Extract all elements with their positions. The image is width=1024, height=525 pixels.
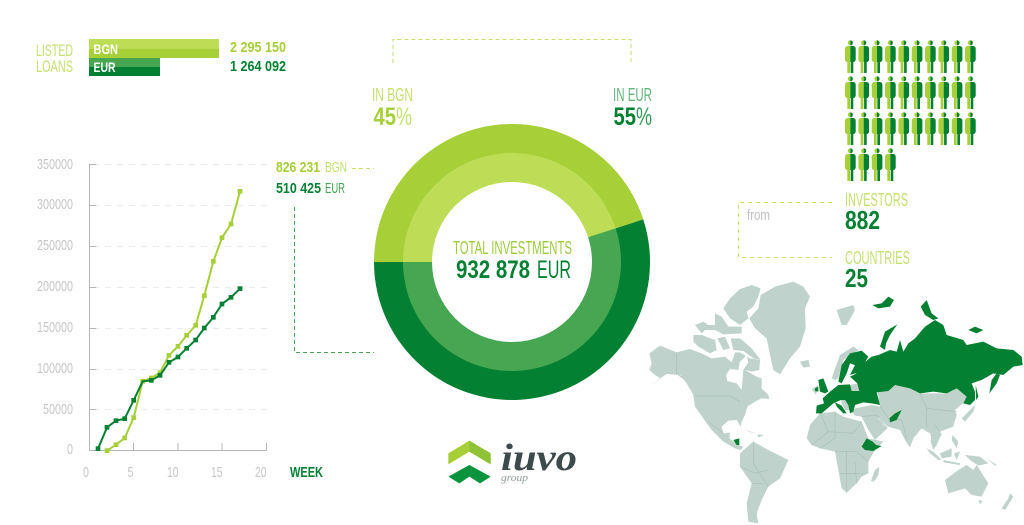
donut centre label (453, 238, 572, 284)
connector: from bracket (738, 202, 832, 258)
x axis labels: 0 (83, 464, 89, 481)
y axis labels: 200000 (37, 278, 73, 295)
stat: investors: 882 (845, 205, 880, 235)
callout: EUR investments: EUR (325, 180, 345, 197)
y axis labels (37, 156, 73, 458)
heading: listed loans (36, 41, 73, 76)
x axis labels: 10 (167, 464, 178, 481)
series: dark EUR line (96, 286, 242, 451)
value: EUR loans: 1 264 092 (230, 58, 286, 75)
logo mark (448, 441, 491, 483)
x axis labels: 5 (128, 464, 134, 481)
x axis labels: 20 (255, 464, 266, 481)
callout: EUR investments (276, 180, 374, 352)
label: in BGN (372, 85, 413, 131)
label: in EUR: % (636, 103, 652, 131)
stat: countries: 25 (845, 263, 868, 293)
world map (649, 282, 1023, 523)
line chart: weekly investments (37, 156, 323, 481)
stat: countries (845, 248, 910, 293)
x axis labels: 15 (211, 464, 222, 481)
y axis labels: 100000 (37, 360, 73, 377)
connector: currencies bracket (393, 40, 631, 63)
map: Arctic and Greenland (693, 282, 810, 374)
donut centre label: EUR (537, 256, 571, 284)
label: in EUR: 55 (614, 103, 636, 131)
bar: BGN (89, 39, 219, 58)
logo wordmark: iuvo (501, 437, 577, 479)
y axis labels: 50000 (43, 401, 73, 418)
chart axes (90, 164, 266, 450)
label: in BGN: IN BGN (372, 85, 413, 105)
donut centre label: TOTAL INVESTMENTS (453, 238, 572, 258)
heading: listed loans: LISTED (36, 41, 73, 60)
x axis title: WEEK (290, 464, 323, 481)
y axis labels: 150000 (37, 319, 73, 336)
callout: BGN investments (276, 159, 374, 176)
y axis labels: 0 (67, 441, 73, 458)
bar: BGN: BGN (94, 41, 118, 57)
value: BGN loans: 2 295 150 (230, 39, 286, 56)
y axis labels: 350000 (37, 156, 73, 173)
stat: countries: COUNTRIES (845, 248, 910, 268)
series: light BGN line (105, 189, 242, 453)
logo: iuvo group: group (501, 473, 528, 484)
map: Americas (649, 346, 788, 523)
bar: EUR: EUR (94, 59, 116, 75)
callout: EUR investments: 510 425 (276, 180, 321, 197)
callout: BGN investments: BGN (325, 159, 347, 176)
stat: investors (845, 190, 908, 235)
label: in EUR: IN EUR (613, 85, 652, 105)
logo: iuvo group (448, 437, 577, 484)
heading: listed loans: LOANS (36, 57, 73, 76)
y axis labels: 250000 (37, 237, 73, 254)
panel: listed loans (36, 39, 286, 76)
donut centre label: 932 878 (456, 256, 530, 284)
label: in BGN: 45 (374, 103, 396, 131)
label: in BGN: % (396, 103, 412, 131)
y axis labels: 300000 (37, 196, 73, 213)
bar: EUR (89, 58, 160, 76)
x axis labels (83, 464, 266, 481)
donut chart: total investments (374, 124, 650, 400)
map: Russia and Europe (812, 297, 1023, 413)
callout: BGN investments: 826 231 (276, 159, 320, 176)
pictogram: investors (845, 40, 976, 181)
stat: investors: INVESTORS (845, 190, 908, 210)
map: Asia and Africa (807, 383, 1013, 510)
label: in EUR (613, 85, 652, 131)
label: from: from (747, 207, 770, 224)
